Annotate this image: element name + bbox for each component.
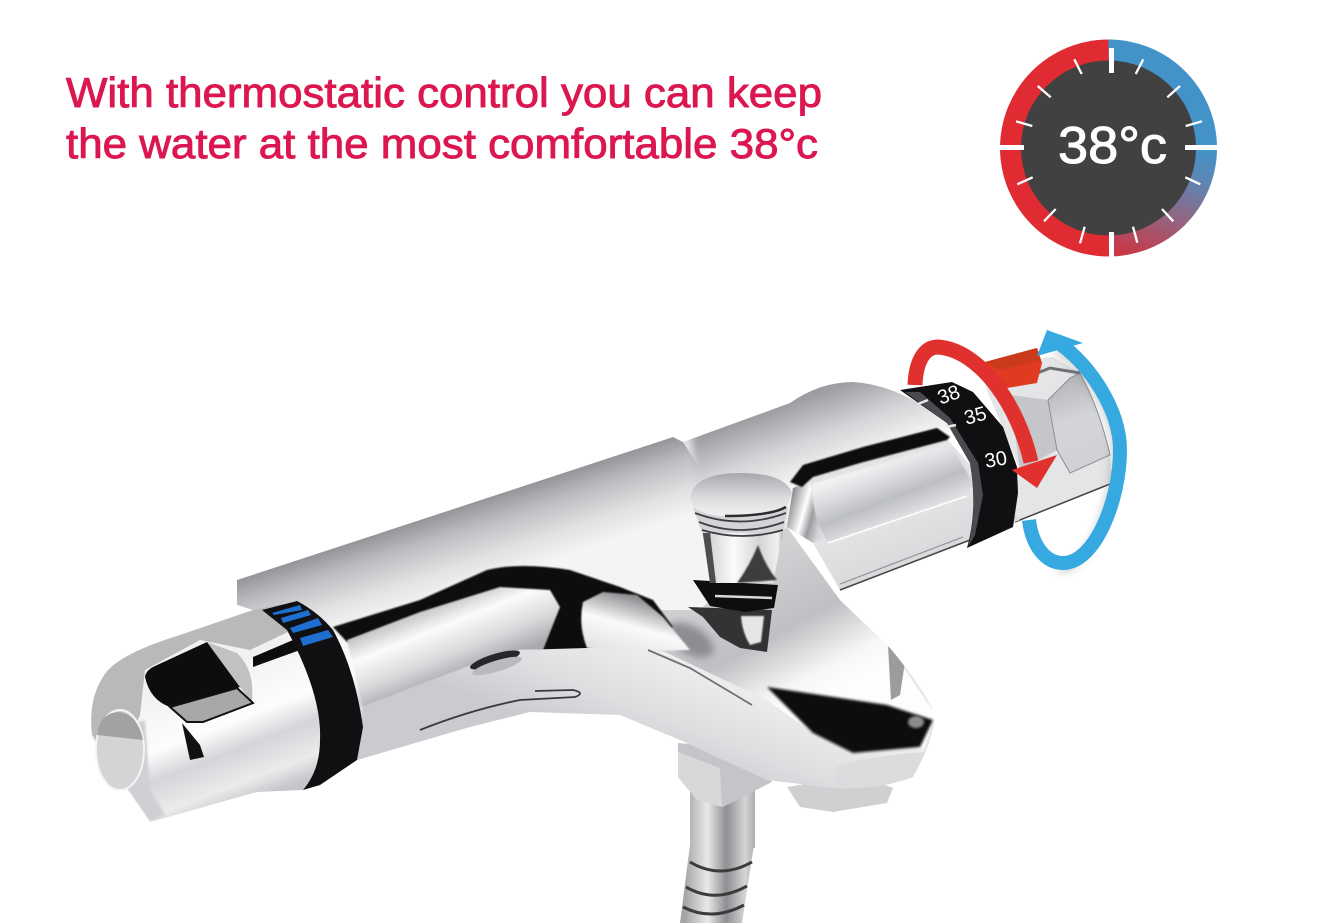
ridge lines: [695, 513, 786, 536]
dark reflection: [790, 428, 950, 487]
title: With thermostatic control you can keep: [66, 69, 822, 116]
faucet: shower hose: [680, 838, 755, 923]
grip bar: [253, 640, 300, 667]
knob base: [688, 607, 772, 652]
lip groove lower: [420, 690, 580, 730]
spout aerator highlight: [888, 646, 905, 700]
deck right lobe: [687, 382, 950, 513]
left cylinder: [92, 632, 372, 813]
knob shadow fade: [670, 618, 717, 662]
cap shadow line: [725, 507, 786, 516]
diverter knob: [688, 473, 792, 652]
temperature numbers: [935, 381, 1009, 473]
knob stem: [702, 528, 783, 583]
spout shoulder: [660, 527, 935, 753]
spout dark reflection: [767, 687, 933, 753]
spout lip: [357, 647, 925, 788]
window facet: [207, 642, 252, 702]
temperature gauge: 38°c: [1058, 117, 1167, 175]
neck highlight: [787, 483, 822, 543]
dark reflection band: [333, 566, 673, 650]
knob dark ring: [693, 580, 778, 612]
temperature gauge: [999, 40, 1217, 257]
lower grip shadow: [182, 723, 204, 760]
lip groove upper: [648, 650, 752, 705]
lower rim line: [840, 537, 963, 584]
faucet: end-cap details: [91, 604, 300, 790]
facet edge: [828, 496, 967, 543]
stem dark reflection: [737, 545, 777, 583]
arrow shadow: [1055, 350, 1114, 570]
spout tip facet: [850, 752, 924, 782]
right dark collar: [900, 381, 1018, 548]
title: the water at the most comfortable 38°c: [66, 120, 818, 167]
temperature numbers: 30: [983, 447, 1009, 473]
temperature numbers: 35: [962, 403, 989, 430]
faucet: dial end of right cylinder: [985, 357, 1112, 525]
temperature numbers: 38: [935, 381, 963, 410]
left dark collar: [262, 601, 363, 790]
knob ring highlights: [715, 596, 772, 598]
upper facet: [812, 443, 973, 542]
knob base highlight: [741, 616, 764, 645]
arrow: blue counter-clockwise: [1029, 330, 1120, 563]
knob cap: [690, 473, 792, 517]
arrow: red clockwise: [915, 347, 1057, 488]
recessed grip on the dial: [1048, 373, 1110, 473]
faucet: spout mounting nut: [787, 775, 893, 812]
window floor: [170, 688, 253, 722]
title: [66, 69, 822, 167]
faucet: hose connector nut: [678, 743, 772, 848]
red temperature button: [985, 348, 1042, 388]
collar highlights: [918, 400, 956, 427]
dark window: [145, 642, 240, 707]
lip recess: [470, 650, 520, 670]
knob ridges: [693, 507, 788, 533]
right lobe under band: [581, 592, 690, 652]
deck cover: [237, 437, 740, 640]
barrel edge: [840, 540, 970, 590]
end button: [96, 710, 144, 790]
faucet: right cylinder: [787, 428, 1020, 590]
collar silver strip: [905, 392, 983, 547]
faucet: main body and spout: [80, 360, 960, 830]
left body capsule: [347, 587, 560, 707]
stem left shade: [703, 533, 716, 583]
blue marks: [272, 605, 333, 646]
lower dome shade: [92, 720, 165, 822]
cylinder barrel: [787, 428, 1020, 590]
spout specular: [908, 716, 924, 728]
